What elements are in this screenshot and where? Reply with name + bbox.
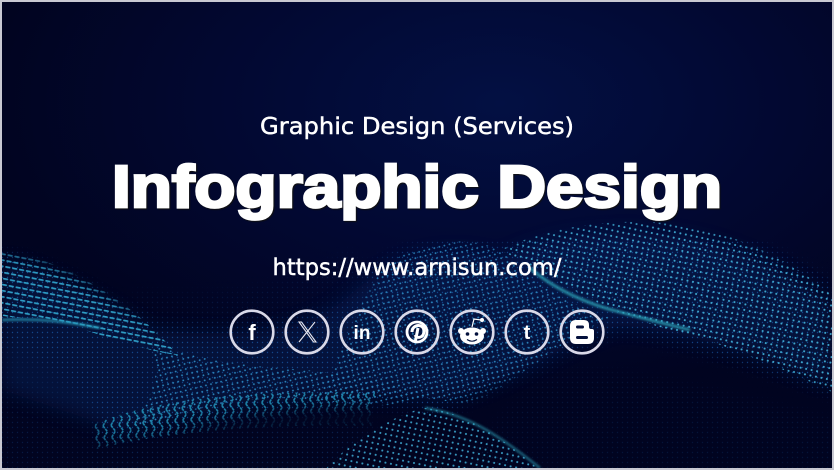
lower wave dots — [325, 408, 540, 470]
bottom chevrons — [92, 392, 375, 450]
left hump hatch — [2, 250, 178, 355]
icon: facebook: f — [248, 320, 256, 345]
icon: pinterest — [396, 311, 438, 353]
dotted wave surface — [0, 222, 834, 470]
right hump — [500, 222, 832, 392]
icon: tumblr — [506, 311, 548, 353]
icon: reddit — [451, 311, 493, 353]
dots under mask — [0, 222, 834, 470]
icon: blogger — [561, 311, 603, 353]
title: Infographic Design — [112, 154, 722, 220]
social icons — [231, 311, 603, 353]
subtitle: Graphic Design (Services) — [260, 114, 574, 140]
website url: https://www.arnisun.com/ — [272, 255, 562, 281]
ridge center right — [530, 268, 690, 330]
icon: linkedin — [341, 311, 383, 353]
wave glow — [2, 232, 832, 430]
icon: facebook — [231, 311, 273, 353]
ridge lower — [425, 408, 540, 468]
icon: tumblr: t — [524, 322, 531, 344]
mid-left dots — [130, 345, 430, 430]
ridge left — [2, 319, 100, 328]
dim dots field — [0, 240, 834, 470]
icon: X — [286, 311, 328, 353]
center hump — [320, 241, 610, 405]
icon: linkedin: in — [354, 323, 370, 344]
